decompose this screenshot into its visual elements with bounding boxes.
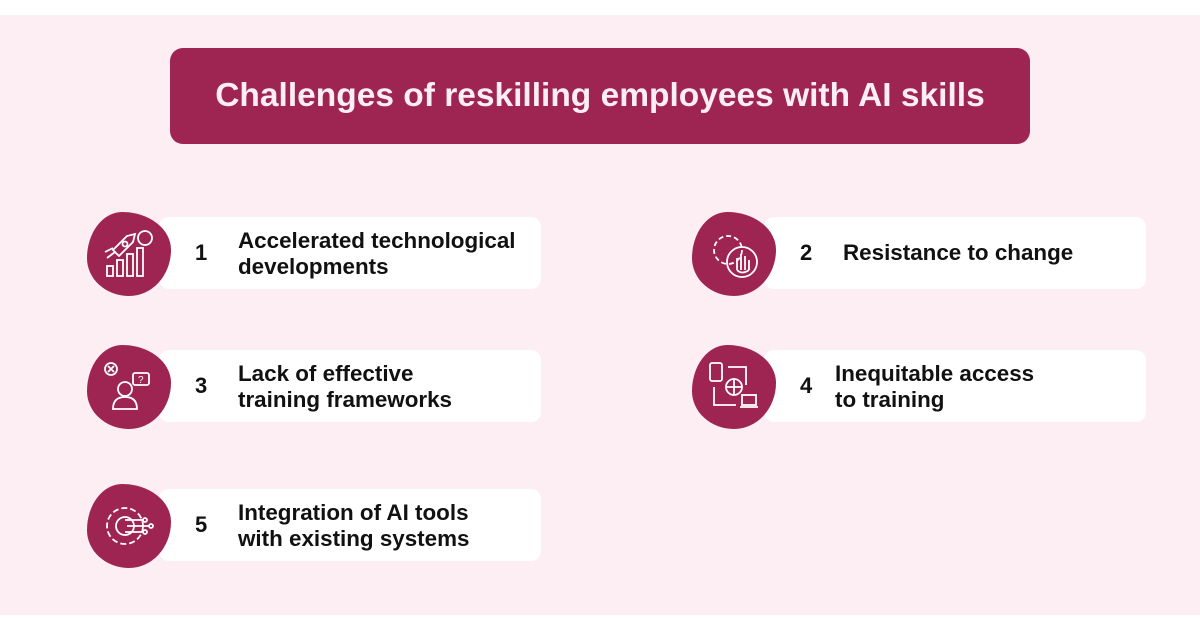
item 2 <box>692 212 1146 296</box>
text <box>238 361 452 412</box>
icon: confused person: ? <box>138 375 144 386</box>
icon: AI gear circuit <box>87 484 171 568</box>
text <box>238 500 469 551</box>
text: Resistance to change <box>843 240 1073 265</box>
item 3 <box>87 345 541 429</box>
text: training frameworks <box>238 387 452 412</box>
item 4: 4 <box>800 373 812 398</box>
title: Challenges of reskilling employees with AI skills <box>215 77 985 114</box>
icon: confused person <box>87 345 171 429</box>
text: with existing systems <box>238 526 469 551</box>
icon: rocket and growth bars <box>87 212 171 296</box>
item 2: 2 <box>800 240 812 265</box>
text: Integration of AI tools <box>238 500 469 525</box>
icon: hand and gear <box>692 212 776 296</box>
item 4 <box>692 345 1146 429</box>
item 5: 5 <box>195 512 207 537</box>
item 1: 1 <box>195 240 207 265</box>
text: developments <box>238 254 389 279</box>
title <box>170 48 1030 144</box>
text: Accelerated technological <box>238 228 516 253</box>
text <box>238 228 516 279</box>
text: Inequitable access <box>835 361 1034 386</box>
text: Lack of effective <box>238 361 413 386</box>
item 5 <box>87 484 541 568</box>
item 3: 3 <box>195 373 207 398</box>
text <box>835 361 1034 412</box>
item 1 <box>87 212 541 296</box>
text: to training <box>835 387 944 412</box>
icon: devices and globe <box>692 345 776 429</box>
